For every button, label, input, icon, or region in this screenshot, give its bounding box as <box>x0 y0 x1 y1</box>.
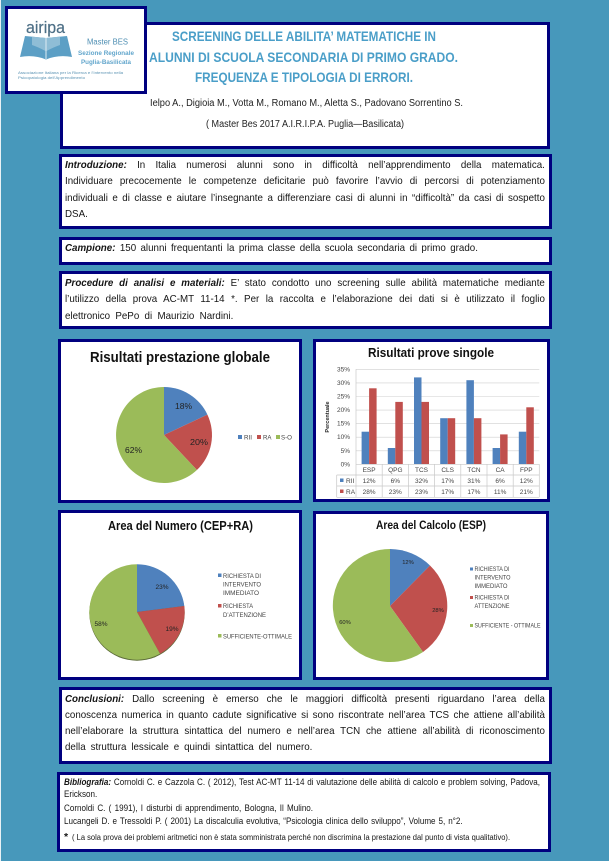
legend: RII <box>244 436 252 442</box>
data table: 32% <box>415 478 428 485</box>
text: procedure <box>65 277 545 322</box>
panel: logo <box>5 6 147 94</box>
pie chart: 23% <box>155 584 169 591</box>
data table: 11% <box>494 489 507 496</box>
text: introduzione: individuali e di classe e aiutare l’insegnante a differenziare casi di alunni in “difficoltà” da casi di sospetto <box>65 192 545 204</box>
text: bibliografia: ( La sola prova dei problemi aritmetici non è stata somministrata perché non discrimina la prestazione dal punto di vista qualitativo). <box>72 833 510 842</box>
heading: poster title <box>149 28 458 85</box>
data table: CA <box>496 467 505 474</box>
legend <box>238 435 292 442</box>
panel: procedure <box>59 271 552 329</box>
panel: introduzione <box>59 154 552 229</box>
text: conclusioni: conoscenza numerica in quanto cadute significative si sono riscontrate nell’area TCS che attiene all’abilità <box>65 709 545 721</box>
heading: poster title: ALUNNI DI SCUOLA SECONDARIA DI PRIMO GRADO. <box>149 49 458 65</box>
data table: 28% <box>363 489 376 496</box>
pie chart: 18% <box>175 402 192 411</box>
panel: area del calcolo <box>313 511 549 680</box>
pie chart <box>116 387 212 483</box>
pie chart: 12% <box>402 560 414 566</box>
text: section: Sezione Regionale <box>78 50 134 57</box>
heading: poster title: FREQUENZA E TIPOLOGIA DI ERRORI. <box>195 69 413 85</box>
data table: 12% <box>520 478 533 485</box>
pie chart: 62% <box>125 446 142 455</box>
legend <box>470 567 540 630</box>
pie chart: 28% <box>432 608 444 614</box>
panel: bibliografia <box>57 772 551 852</box>
data table: TCS <box>415 467 429 474</box>
data table: 17% <box>467 489 481 496</box>
text: procedure: l’utilizzo della prova AC-MT 11-14 *. Per la raccolta e l’elaborazione dei dati si è utilizzato il foglio <box>65 293 545 305</box>
data table: 12% <box>363 478 376 485</box>
y axis: 25% <box>337 394 350 400</box>
text: introduzione: DSA. <box>65 208 88 220</box>
text: campione: Campione: 150 alunni frequentanti la prima classe della scuola secondaria di primo grado. <box>65 242 478 254</box>
heading: poster title: SCREENING DELLE ABILITA’ MATEMATICHE IN <box>172 28 436 44</box>
panel: risultati prove singole <box>313 339 550 502</box>
legend: RICHIESTA DI <box>223 574 261 580</box>
y axis: 10% <box>337 434 350 441</box>
text: section <box>78 50 134 66</box>
data table: 23% <box>389 489 402 496</box>
data table: QPG <box>388 467 403 474</box>
pie chart <box>89 564 185 661</box>
pie chart: 60% <box>339 620 351 626</box>
data table: 6% <box>391 478 400 485</box>
legend: IMMEDIATO <box>474 584 508 590</box>
chart title: Risultati prove singole <box>368 346 494 360</box>
icon: open book <box>20 36 72 60</box>
panel: title <box>60 22 550 149</box>
pie chart: 58% <box>94 621 108 628</box>
text: association: Psicopatologia dell’Apprendimento <box>18 75 86 80</box>
text: master: Master BES <box>87 38 128 46</box>
y axis: 20% <box>337 407 350 414</box>
data table: 31% <box>467 478 481 485</box>
text: association: Associazione Italiana per la Ricerca e l’Intervento nella <box>18 70 124 75</box>
text: affiliation: ( Master Bes 2017 A.I.R.I.P.A. Puglia—Basilicata) <box>206 119 404 130</box>
text: introduzione <box>65 159 545 220</box>
text: authors: Ielpo A., Digioia M., Votta M., Romano M., Aletta S., Padovano Sorrentino S. <box>150 98 463 109</box>
text: introduzione: Individuare precocemente le competenze deficitarie può favorire l’avvio di percorsi di potenziamento <box>65 175 545 187</box>
text: bibliografia: Cornoldi C. ( 1991), I disturbi di apprendimento, Bologna, Il Mulino. <box>64 803 313 814</box>
y axis: 15% <box>337 421 350 428</box>
text: procedure: elettronico PePo di Maurizio Nardini. <box>65 310 233 322</box>
legend: S-O <box>281 436 292 442</box>
pie chart <box>333 549 447 662</box>
y axis: 5% <box>341 448 350 455</box>
chart title: Risultati prestazione globale <box>90 349 270 366</box>
data table: 17% <box>441 489 454 496</box>
legend: RA <box>263 436 272 442</box>
logo wordmark: airipa <box>26 19 66 37</box>
legend: RICHIESTA DI <box>474 596 510 602</box>
chart title: Area del Numero (CEP+RA) <box>108 519 253 533</box>
text: bibliografia: Erickson. <box>64 789 97 800</box>
legend: INTERVENTO <box>223 582 261 588</box>
text: conclusioni: nell’elaborare la struttura sintattica del numero e nell’area TCN che attiene all’abilità di riconoscimento <box>65 725 545 737</box>
text: conclusioni: della struttura lessicale e quindi sintattica del numero. <box>65 741 312 753</box>
legend: RICHIESTA <box>223 604 253 610</box>
data table: 6% <box>495 478 505 485</box>
pie chart: 20% <box>190 438 208 447</box>
text: introduzione: Introduzione: In Italia numerosi alunni sono in difficoltà nell’apprendimento della matematica. <box>65 159 545 171</box>
y axis: 30% <box>337 380 350 387</box>
y axis <box>325 366 539 468</box>
data table <box>337 369 539 497</box>
y axis: 0% <box>341 462 350 468</box>
data table: 23% <box>415 489 428 496</box>
panel: campione <box>59 237 552 265</box>
data table: ESP <box>363 467 376 474</box>
text: bibliografia: Lucangeli D. e Tressoldi P. ( 2001) La discalculia evolutiva, “Psicologia clinica dello sviluppo”, Volume 5, n°2. <box>64 816 463 827</box>
data table: CLS <box>441 467 455 474</box>
legend: RICHIESTA DI <box>474 567 510 573</box>
legend <box>218 574 292 640</box>
data table: 17% <box>441 478 454 485</box>
text: conclusioni <box>65 693 545 753</box>
legend: ATTENZIONE <box>474 604 510 610</box>
data table: 21% <box>520 489 533 496</box>
text: conclusioni: Conclusioni: Dallo screening è emerso che le maggiori difficoltà presenti riguardano l’area della <box>65 693 545 705</box>
data table: FPP <box>520 467 533 474</box>
text: bibliografia <box>64 777 540 843</box>
panel: conclusioni <box>59 687 552 764</box>
text: section: Puglia-Basilicata <box>81 59 131 66</box>
legend: SUFFICIENTE-OTTIMALE <box>223 634 292 640</box>
text: association <box>18 70 124 80</box>
y axis: 35% <box>337 366 350 374</box>
legend: INTERVENTO <box>474 576 511 582</box>
data table: RA <box>346 489 356 496</box>
text: bibliografia: * <box>64 831 68 843</box>
bar chart <box>362 377 534 464</box>
legend: IMMEDIATO <box>223 591 259 597</box>
legend: SUFFICIENTE - OTTIMALE <box>474 624 540 630</box>
text: bibliografia: Bibliografia: Cornoldi C. e Cazzola C. ( 2012), Test AC-MT 11-14 di valutazione delle abilità di calcolo e problem solving, Padova, <box>64 777 540 788</box>
panel: area del numero <box>58 510 302 680</box>
legend: D’ATTENZIONE <box>223 613 266 619</box>
pie chart: 19% <box>165 626 179 633</box>
panel: risultati prestazione globale <box>58 339 302 503</box>
data table: TCN <box>467 467 481 474</box>
text: procedure: Procedure di analisi e materiali: E’ stato condotto uno screening sulle abilità matematiche mediante <box>65 277 545 289</box>
y axis: Percentuale <box>325 401 331 433</box>
chart title: Area del Calcolo (ESP) <box>376 518 486 532</box>
data table: RII <box>346 478 354 485</box>
